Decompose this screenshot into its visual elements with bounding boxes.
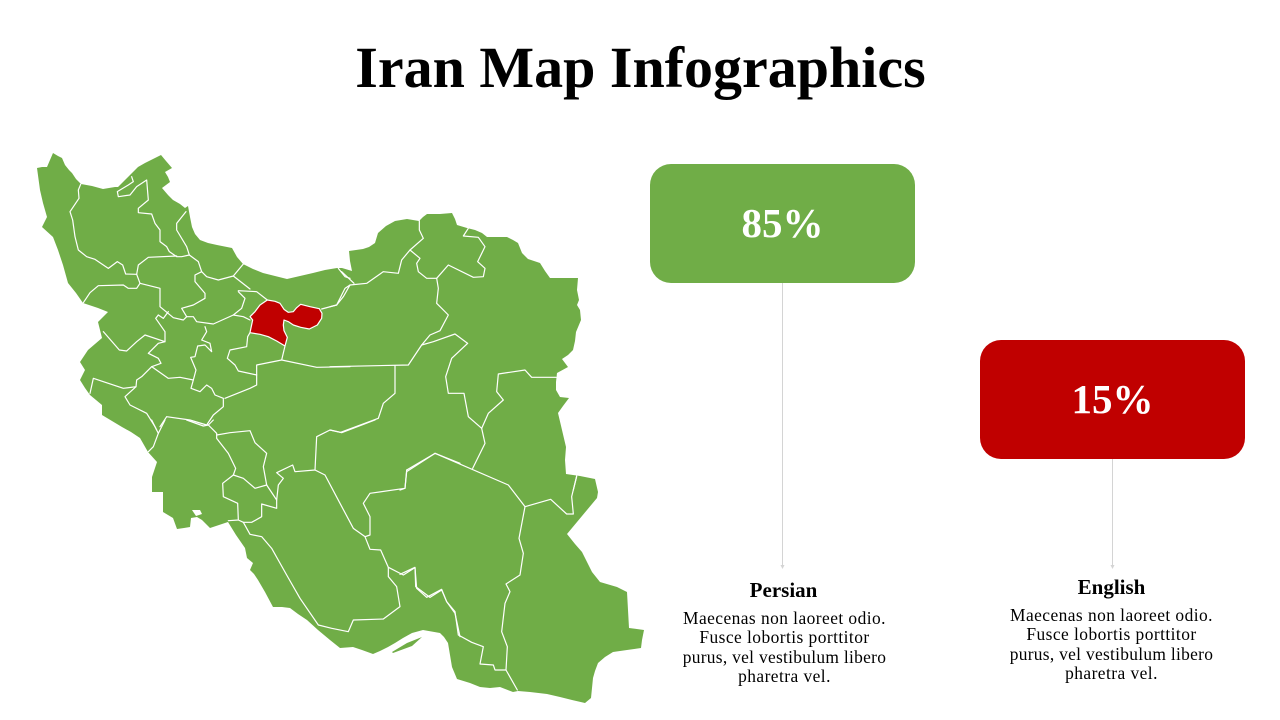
text block: Persian bbox=[683, 608, 886, 686]
text block: English bbox=[1010, 605, 1213, 683]
highlighted province in red bbox=[250, 300, 322, 346]
title: Iran Map Infographics bbox=[355, 35, 926, 100]
stat box: 85%: 85% bbox=[742, 200, 824, 246]
stat box: 15% bbox=[980, 340, 1245, 459]
text block: English: pharetra vel. bbox=[1065, 663, 1158, 683]
text block: Persian: Fusce lobortis porttitor bbox=[699, 627, 870, 647]
text block: English: Fusce lobortis porttitor bbox=[1026, 624, 1197, 644]
stat box: 85% bbox=[650, 164, 915, 283]
map outline: provinces in green bbox=[37, 153, 644, 703]
heading: Persian: Persian bbox=[750, 578, 817, 602]
text block: English: Maecenas non laoreet odio. bbox=[1010, 605, 1213, 625]
text block: Persian: Maecenas non laoreet odio. bbox=[683, 608, 886, 628]
text block: Persian: pharetra vel. bbox=[738, 666, 831, 686]
text block: English: purus, vel vestibulum libero bbox=[1010, 644, 1213, 664]
province borders bbox=[70, 177, 577, 690]
text block: Persian: purus, vel vestibulum libero bbox=[683, 647, 886, 667]
stat box: 15%: 15% bbox=[1072, 376, 1154, 422]
heading: English: English bbox=[1078, 575, 1145, 599]
